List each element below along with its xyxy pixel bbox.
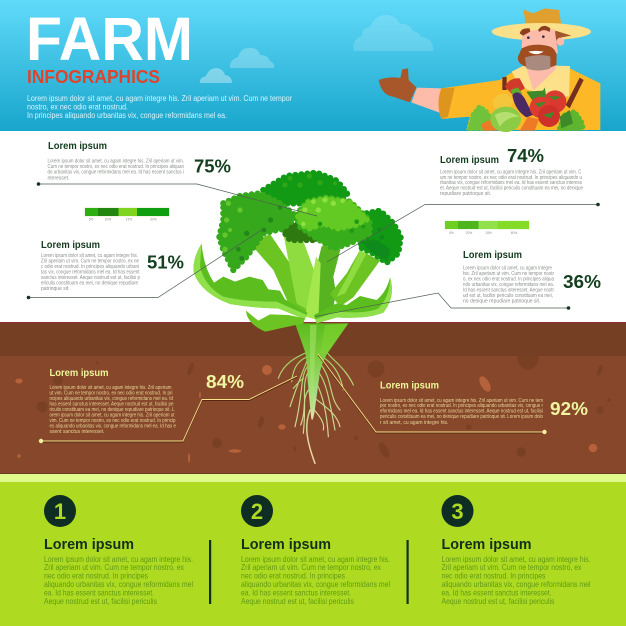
step 1 text: aliquando urbanitas vix, congue reformidans mel: [44, 579, 193, 589]
text block: ndo urbanitas vix, congue reformidans mel ea.: [463, 282, 554, 288]
text block: has essent sanctus interesset. Aeque nostrud est ut, facilisi pe: [50, 402, 174, 408]
percentage: 84%: [206, 371, 244, 392]
text block: Zril aperiam ut vim. Cum ne tempor nostro, ex ne: [41, 258, 139, 264]
farmer arm and glove: [379, 68, 441, 113]
leaf lower left: [246, 311, 305, 332]
step 1 text: Aeque nostrud est ut, facilisi periculis: [44, 596, 157, 606]
vegetables basket: [470, 78, 583, 132]
step 2 text: [241, 554, 390, 606]
step 3 text: nec odio erat nostrud. In principes: [442, 570, 546, 580]
icon: cloud right of title: [230, 48, 274, 68]
header text block: nostro, ex nec odio erat nostrud.: [27, 102, 128, 112]
text block: Lorem ipsum dolor sit amet, cu agam integre his.: [41, 253, 138, 259]
bar chart left: 20%: [105, 218, 111, 222]
text block: ut vim. Cum ne tempor nostro, ex nec odio erat nostrud. In pri: [50, 390, 172, 396]
icon: small cloud: [200, 68, 232, 83]
bar chart left: [84, 208, 170, 222]
step 2 text: nec odio erat nostrud. In principes: [241, 570, 345, 580]
bar chart left: 5%: [89, 218, 93, 222]
header text block: Lorem ipsum dolor sit amet, cu agam integre his. Zril aperiam ut vim. Cum ne tempor: [27, 94, 292, 103]
number badge 1: [44, 495, 76, 527]
panel: soil block left: [50, 367, 244, 435]
leaf right: [314, 277, 392, 323]
farmer body: [438, 60, 600, 130]
bar chart right: 5%: [449, 231, 454, 235]
step 3 text: Lorem ipsum dolor sit amet, cu agam integre his.: [442, 554, 590, 564]
panel: block top right: [440, 145, 583, 197]
bar chart left: 15%: [126, 218, 132, 222]
header text block: In principes aliquando urbanitas vix, congue reformidans mel ea.: [27, 111, 227, 120]
panel: block top left: [48, 140, 231, 181]
heading: Lorem ipsum: [41, 239, 100, 251]
connector 74%: [327, 203, 600, 262]
text block: patrioque sit.: [41, 286, 70, 292]
step 3 text: Aeque nostrud est ut, facilisi periculis: [442, 596, 554, 606]
broccoli florets: [219, 173, 401, 270]
text block: ericulis constituam ea mei, no denique repudiare: [41, 280, 138, 286]
step 2: [241, 495, 390, 606]
text block: Lorem ipsum dolor sit amet, cu agam integre his. Zril aperiam ut vim. C: [440, 169, 582, 175]
title: FARM: [26, 5, 193, 73]
percentage: 74%: [507, 145, 544, 166]
text block: orem ipsum dolor sit amet, cu agam integre his. Zril aperiam ut: [50, 412, 175, 418]
text block: his. Zril aperiam ut vim. Cum ne tempor nostr: [463, 271, 554, 277]
bar chart right: [444, 220, 530, 235]
bar chart right: 60%: [511, 231, 517, 235]
text block: nteresset.: [48, 175, 69, 181]
percentage: 36%: [563, 271, 601, 292]
heading: Lorem ipsum: [440, 154, 499, 166]
heading: Lorem ipsum: [50, 367, 108, 379]
heading: Lorem ipsum: [380, 380, 439, 392]
percentage: 75%: [194, 156, 231, 176]
bar chart right: 20%: [466, 231, 472, 235]
step 3 text: ea. Id has essent sanctus interesset.: [442, 588, 552, 598]
text block: [463, 266, 554, 304]
text block: vim. Cum ne tempor nostro, ex nec odio erat nostrud. In princip: [50, 418, 176, 424]
step 3 heading: Lorem ipsum: [442, 536, 532, 553]
text block: ud est ut, facilisi periculis constituam ea mei,: [463, 293, 553, 299]
text block: et. Aeque nostrud est ut, facilisi periculis constituam ea mei, no denique: [440, 186, 583, 192]
text block: Lorem ipsum dolor sit amet, cu agam integre his. Zril aperiam ut vim. Cum ne tem: [380, 398, 543, 404]
number badge 2: [241, 495, 273, 527]
header panel: [0, 0, 626, 131]
icon: large cloud: [353, 15, 433, 51]
text block: riculis constituam ea mei, no denique repudiare patrioque sit. L: [50, 407, 175, 413]
step 3 text: Zril aperiam ut vim. Cum ne tempor nostro, ex: [442, 562, 582, 572]
step 3 text: aliquando urbanitas vix, congue reformidans mel: [442, 579, 591, 589]
text block: r sit amet, cu agam integre his.: [380, 420, 448, 426]
connector 36%: [315, 293, 570, 316]
text block: Lorem ipsum dolor sit amet, cu agam integre his. Zril aperiam: [50, 385, 172, 391]
farmer head: [492, 8, 591, 70]
text block: Lorem ipsum dolor sit amet, cu agam integre his. Zril aperiam ut vim.: [48, 158, 184, 164]
divider one: [209, 540, 211, 604]
panel: block middle right: [463, 249, 601, 304]
connector lines upper: [27, 182, 600, 316]
text block: tas vix, congue reformidans mel ea. Id has essent: [41, 270, 140, 276]
step 2 text: ea. Id has essent sanctus interesset.: [241, 588, 351, 598]
step 1 text: nec odio erat nostrud. In principes: [44, 570, 148, 580]
header text block: [27, 94, 292, 120]
step 1 text: ea. Id has essent sanctus interesset.: [44, 588, 154, 598]
text block: no denique repudiare patrioque sit.: [463, 298, 540, 304]
text block: o, ex nec odio erat nostrud. In principes aliqua: [463, 276, 554, 282]
soil panel: [0, 322, 626, 474]
farmer illustration: [379, 8, 600, 132]
step 2 text: aliquando urbanitas vix, congue reformidans mel: [241, 579, 390, 589]
panel: soil block right: [380, 380, 588, 426]
step 3: [442, 495, 591, 606]
divider two: [406, 540, 409, 604]
subtitle: INFOGRAPHICS: [27, 67, 160, 87]
text block: do urbanitas vix, congue reformidans mel ea. Id has essent sanctus i: [48, 170, 184, 176]
bar chart left: 60%: [150, 218, 157, 222]
number badge 2: 2: [251, 499, 263, 524]
step 1 text: Zril aperiam ut vim. Cum ne tempor nostro, ex: [44, 562, 185, 572]
number badge 3: 3: [451, 499, 464, 524]
step 2 text: Lorem ipsum dolor sit amet, cu agam integre his.: [241, 554, 390, 564]
step 3 text: [442, 554, 591, 606]
leaf left: [194, 243, 307, 319]
heading: Lorem ipsum: [463, 249, 522, 261]
bar chart right: 15%: [485, 231, 492, 235]
connector 51%: [27, 229, 263, 299]
step 2 heading: Lorem ipsum: [241, 536, 331, 553]
text block: por nostro, ex nec odio erat nostrud. In principes aliquando urbanitas vix, congue r: [380, 403, 543, 409]
bottom panel: [0, 474, 626, 626]
text block: periculis constituam ea mei, no denique repudiare patrioque sit. Lorem ipsum dolo: [380, 414, 543, 420]
percentage: 92%: [550, 398, 588, 419]
text block: ncipes aliquando urbanitas vix, congue reformidans mel ea. Id: [50, 396, 173, 402]
text block: [440, 169, 583, 197]
text block: [50, 385, 176, 435]
text block: [380, 398, 543, 426]
broccoli stalks: [250, 225, 380, 320]
heading: Lorem ipsum: [48, 140, 107, 152]
number badge 3: [442, 495, 474, 527]
connector 92%: [318, 354, 547, 434]
step 1 heading: Lorem ipsum: [44, 536, 134, 553]
plant: [194, 173, 401, 463]
step 1 text: Lorem ipsum dolor sit amet, cu agam integre his.: [44, 554, 193, 564]
text block: sanctus interesset. Aeque nostrud est ut, facilisi p: [41, 275, 140, 281]
text block: rbanitas vix, congue reformidans mel ea. Id has essent sanctus interess: [440, 180, 582, 186]
text block: um ne tempor nostro, ex nec odio erat nostrud. In principes aliquando u: [440, 175, 582, 181]
text block: Cum ne tempor nostro, ex nec odio erat nostrud. In principes aliquan: [48, 164, 184, 170]
text block: Lorem ipsum dolor sit amet, cu agam integre: [463, 266, 552, 272]
text block: es aliquando urbanitas vix, congue reformidans mel ea. Id has e: [50, 424, 176, 430]
step 2 text: Zril aperiam ut vim. Cum ne tempor nostro, ex: [241, 562, 382, 572]
roots and taproot: [278, 323, 353, 463]
text block: Id has essent sanctus interesset. Aeque nostr: [463, 288, 554, 294]
step 1 text: [44, 554, 193, 606]
text block: ssent sanctus interesset.: [50, 429, 105, 435]
connector 84%: [39, 376, 297, 443]
number badge 1: 1: [54, 499, 66, 524]
text block: eformidans mel ea. Id has essent sanctus interesset. Aeque nostrud est ut, facilisi: [380, 408, 543, 414]
step 2 text: Aeque nostrud est ut, facilisi periculis: [241, 596, 354, 606]
step 1: [44, 495, 193, 606]
text block: repudiare patrioque sit.: [440, 191, 491, 197]
text block: [48, 158, 184, 181]
panel: block middle left: [41, 239, 184, 292]
percentage: 51%: [147, 252, 184, 272]
text block: c odio erat nostrud. In principes aliquando urbani: [41, 264, 139, 270]
connector 75%: [37, 182, 317, 216]
text block: [41, 253, 140, 292]
